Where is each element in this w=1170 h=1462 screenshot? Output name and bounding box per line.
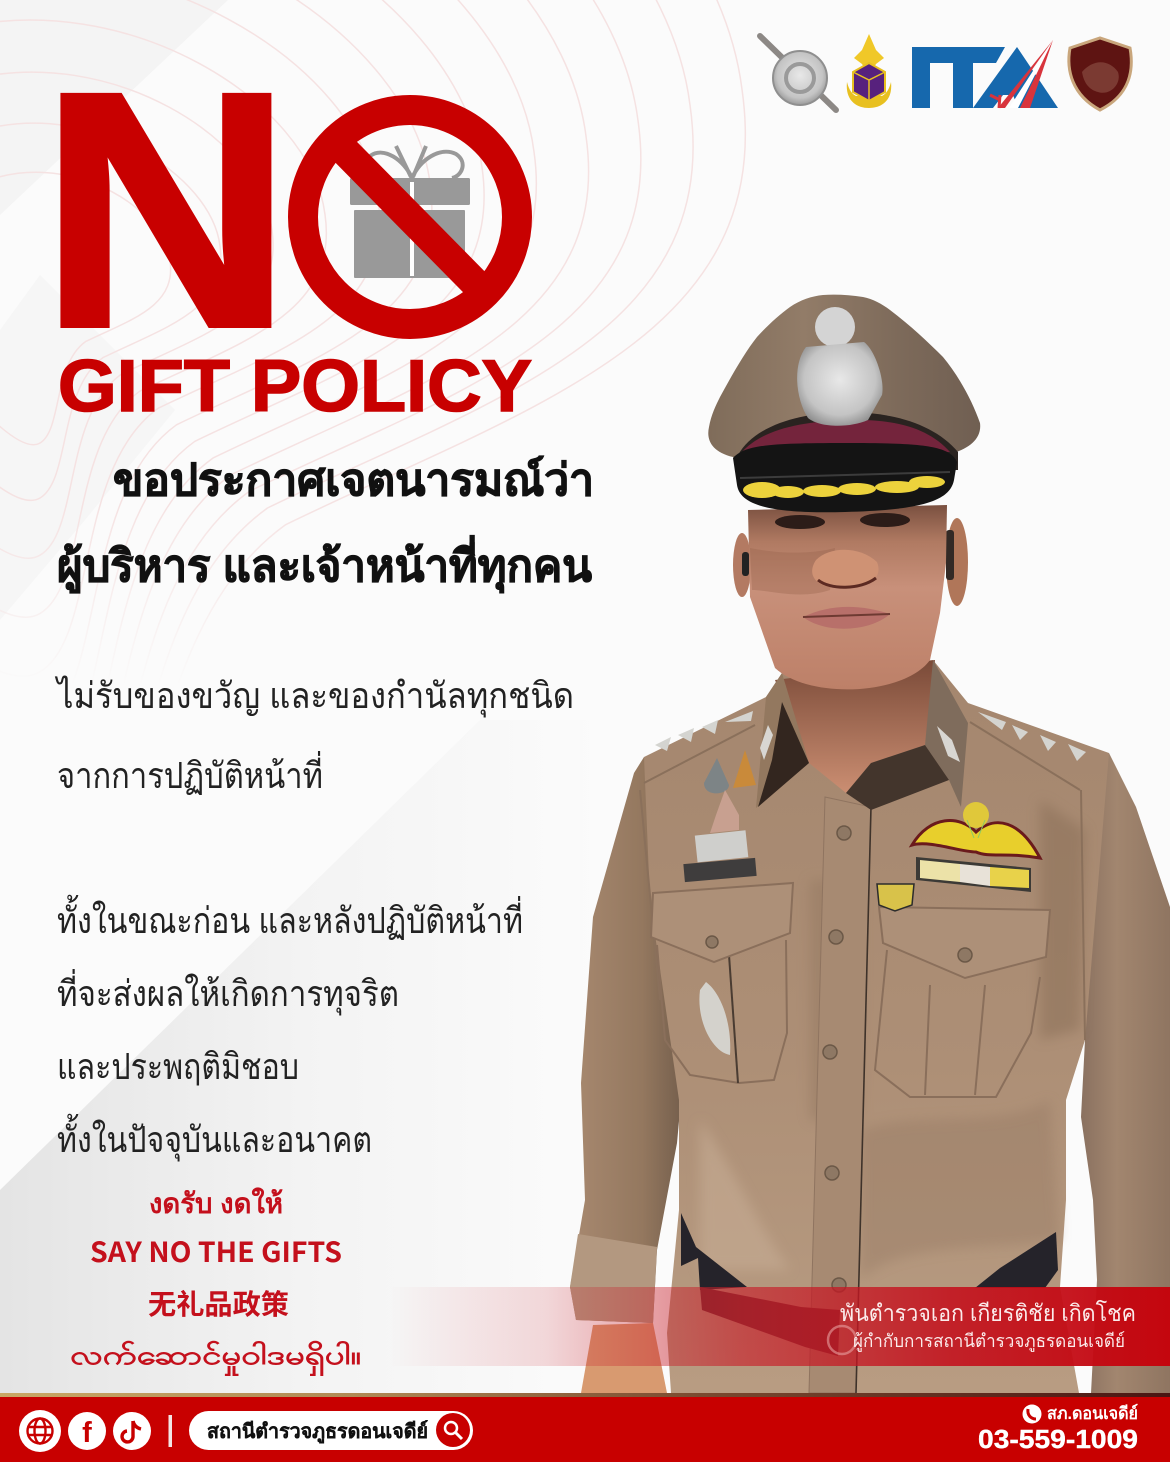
- torso: [644, 660, 1109, 1393]
- heading: declaration: [57, 455, 594, 594]
- icon: prohibition sign: [303, 110, 517, 324]
- collar pins: [760, 725, 960, 762]
- officer name: พันตำรวจเอก เกียรติชัย เกิดโชค: [840, 1300, 1136, 1326]
- epaulettes and shoulder seams: [640, 722, 1085, 1040]
- head: [708, 295, 980, 689]
- pockets: [657, 940, 1040, 1097]
- cap band: [738, 412, 958, 470]
- belt: [681, 1213, 1058, 1356]
- body text: และประพฤติมิชอบ: [57, 1046, 299, 1087]
- gold leaves: [743, 476, 945, 498]
- body text: ไม่รับของขวัญ และของกำนัลทุกชนิด: [54, 675, 574, 718]
- contact: phone number: 03-559-1009: [978, 1424, 1138, 1454]
- heading: gift policy: GIFT POLICY: [58, 346, 532, 427]
- pocket flaps: [651, 883, 793, 962]
- footer: [0, 1393, 1170, 1462]
- logo: ITA: [912, 40, 1058, 108]
- body text: ทั้งในปัจจุบันและอนาคต: [57, 1113, 372, 1162]
- right arm: [1081, 753, 1170, 1393]
- face: [748, 505, 947, 689]
- contact: phone label: สภ.ดอนเจดีย์: [1047, 1403, 1138, 1423]
- silver pocket badge: [699, 982, 730, 1055]
- logo: station shield: [1069, 38, 1131, 110]
- body text: ที่จะส่งผลให้เกิดการทุจริต: [57, 969, 399, 1016]
- icon: gift box: [350, 146, 470, 278]
- medals and name tag: [683, 750, 757, 882]
- officer title: ผู้กำกับการสถานีตำรวจภูธรดอนเจดีย์: [853, 1331, 1125, 1352]
- nose shadow: [750, 548, 835, 594]
- collar: [756, 660, 968, 810]
- logo: silver shield and sword: [760, 36, 836, 110]
- search pill: สถานีตำรวจภูธรดอนเจดีย์: [207, 1420, 428, 1445]
- logo: purple crest: [847, 34, 891, 108]
- ribbon bar: [916, 857, 1031, 892]
- name banner: [390, 1287, 1170, 1366]
- letter N: N: [39, 23, 293, 398]
- neck: [775, 660, 935, 793]
- slogans in four languages: 无礼品政策: [148, 1283, 289, 1323]
- mouth: [803, 607, 890, 629]
- small yellow badge: [877, 884, 914, 911]
- background: [0, 0, 746, 1393]
- parachute wings badge: [912, 802, 1040, 858]
- torso folds: [700, 800, 1085, 1280]
- nose: [812, 550, 879, 588]
- left hand: [581, 1323, 667, 1393]
- heading: declaration: ขอประกาศเจตนารมณ์ว่า: [113, 455, 594, 505]
- cap crown: [708, 295, 980, 470]
- heading: declaration: ผู้บริหาร และเจ้าหน้าที่ทุกคน: [57, 535, 592, 594]
- body text: ทั้งในขณะก่อน และหลังปฏิบัติหน้าที่: [57, 894, 523, 941]
- left arm: [570, 757, 690, 1323]
- slogans in four languages: SAY NO THE GIFTS: [90, 1231, 342, 1271]
- buttons: [706, 826, 972, 1292]
- icon: tiktok: [113, 1412, 151, 1450]
- search pill: [189, 1411, 473, 1450]
- body text: [54, 675, 574, 1162]
- seal watermark: [828, 1326, 856, 1354]
- icon: facebook: f: [82, 1417, 92, 1449]
- slogans in four languages: งดรับ งดให้: [149, 1187, 283, 1219]
- icon: facebook: [68, 1412, 106, 1450]
- rank insignia: [655, 711, 1086, 761]
- body text: จากการปฏิบัติหน้าที่: [57, 751, 323, 796]
- cap badge: [797, 307, 883, 426]
- cap visor: [733, 443, 957, 512]
- logo row: [760, 34, 1131, 110]
- eyes: [775, 513, 910, 529]
- slogans in four languages: [70, 1187, 361, 1377]
- title: NO with prohibited gift: [39, 23, 517, 398]
- separator: [168, 1415, 172, 1447]
- officer portrait: [570, 295, 1170, 1393]
- ears: [733, 533, 751, 597]
- icon: website globe: [19, 1410, 61, 1452]
- placket: [809, 797, 871, 1393]
- left cuff: [570, 1234, 657, 1323]
- slogans in four languages: လက်ဆောင်မှုဝါဒမရှိပါ။: [70, 1340, 361, 1377]
